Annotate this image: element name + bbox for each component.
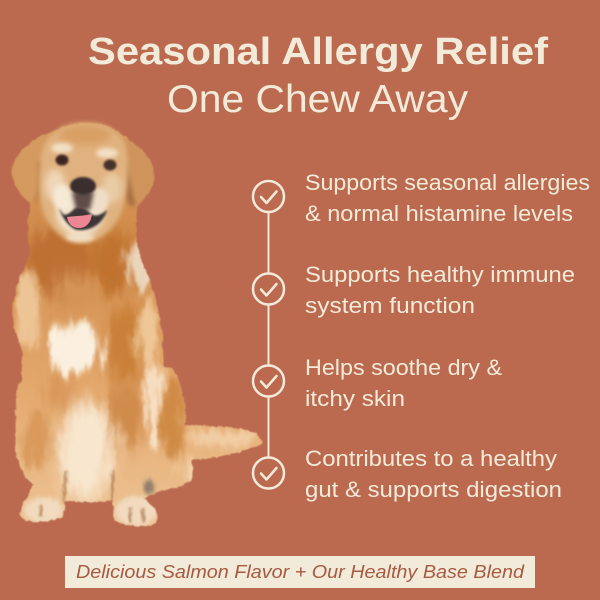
benefit 4 bbox=[305, 446, 562, 502]
dog muzzle bbox=[56, 188, 104, 236]
connector line bbox=[268, 212, 270, 458]
benefit list bbox=[305, 170, 590, 502]
benefit 3: Helps soothe dry & bbox=[305, 355, 502, 380]
benefit 1: & normal histamine levels bbox=[305, 201, 573, 226]
dog head bbox=[12, 123, 154, 243]
icon: check 1 bbox=[253, 181, 284, 212]
benefit 2 bbox=[305, 262, 575, 318]
dog mouth bbox=[59, 208, 107, 231]
subheading: One Chew Away: One Chew Away bbox=[167, 78, 469, 121]
benefit 2: Supports healthy immune bbox=[305, 262, 575, 287]
dog leg shadows bbox=[41, 470, 143, 522]
dog ears bbox=[12, 134, 48, 203]
benefit 3 bbox=[305, 355, 502, 411]
illustration: golden retriever dog bbox=[0, 115, 270, 535]
timeline bbox=[253, 181, 284, 488]
icon: check 4 bbox=[253, 458, 284, 488]
icon: check 2 bbox=[253, 274, 284, 304]
benefit 3: itchy skin bbox=[305, 386, 405, 411]
dog chin bbox=[66, 232, 94, 242]
dog nose bbox=[70, 177, 96, 195]
benefit 1: Supports seasonal allergies bbox=[305, 170, 590, 195]
benefit 2: system function bbox=[305, 293, 475, 318]
benefit 4: Contributes to a healthy bbox=[305, 446, 557, 471]
dog face bbox=[39, 123, 128, 243]
icon: check 3 bbox=[253, 366, 284, 396]
benefit 1 bbox=[305, 170, 590, 226]
title bbox=[88, 31, 548, 121]
dog body and tail bbox=[12, 122, 263, 528]
dog fur shading bbox=[15, 226, 259, 502]
flavor banner bbox=[65, 556, 535, 588]
benefit 4: gut & supports digestion bbox=[305, 477, 562, 502]
flavor banner: Delicious Salmon Flavor + Our Healthy Base Blend bbox=[76, 562, 525, 582]
heading: Seasonal Allergy Relief: Seasonal Allergy Relief bbox=[88, 31, 548, 73]
dog tongue bbox=[67, 214, 92, 228]
dog eyes bbox=[56, 154, 116, 170]
